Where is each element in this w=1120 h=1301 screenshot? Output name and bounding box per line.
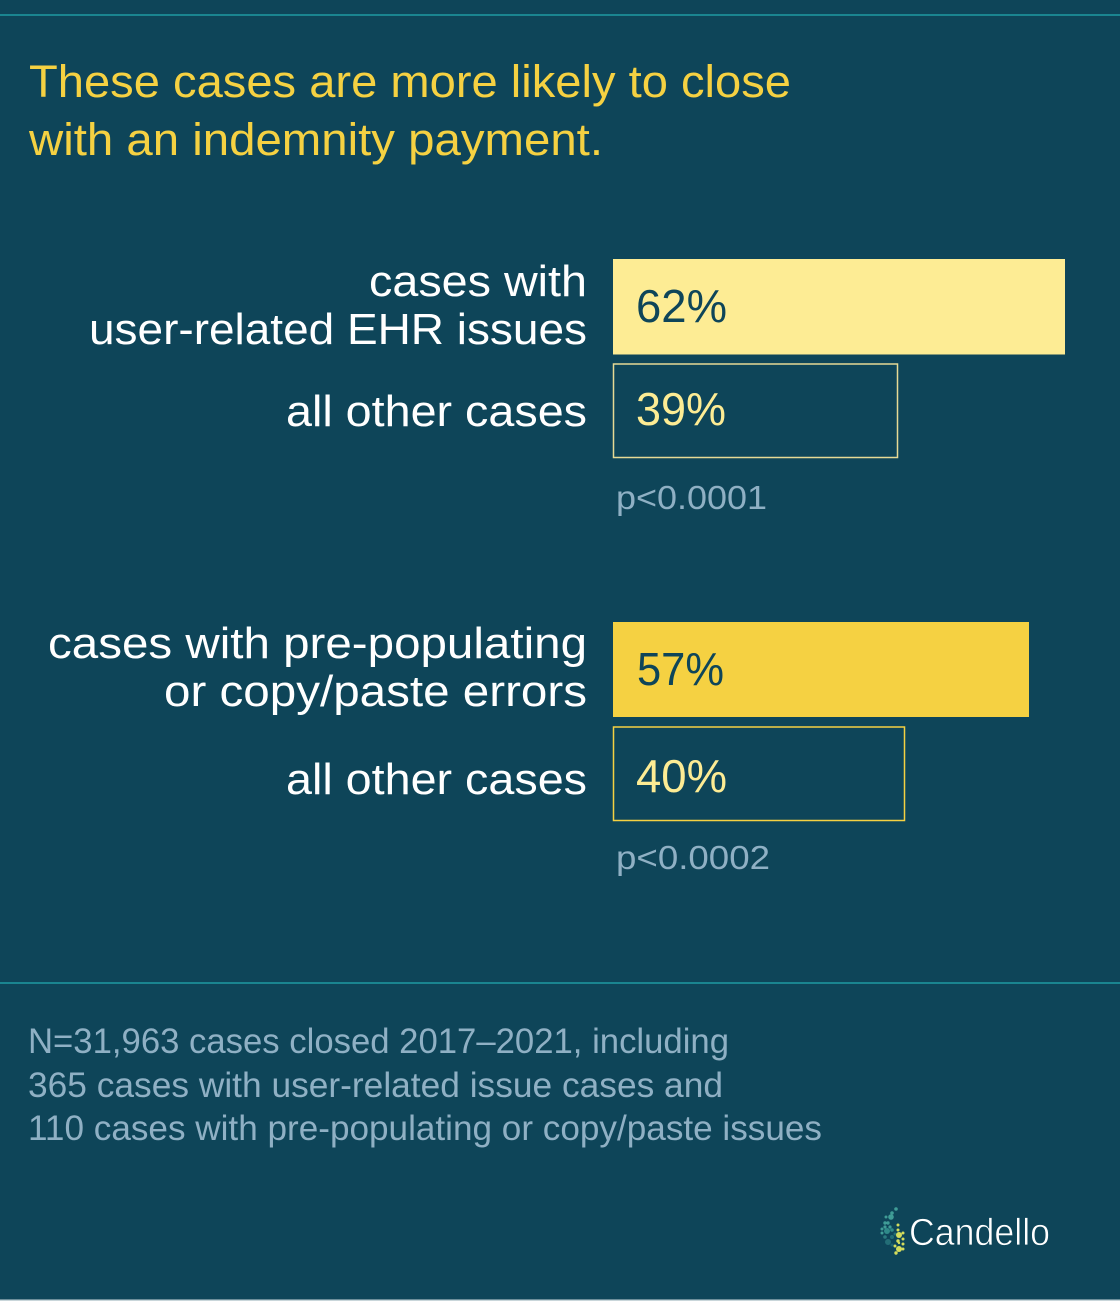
- logo: Candello: [880, 1207, 1050, 1255]
- icon: candle flame dots: [880, 1207, 904, 1255]
- title: with an indemnity payment.: [28, 114, 603, 165]
- p value: p<0.0002: [616, 839, 770, 876]
- footnote: 365 cases with user-related issue cases and: [28, 1066, 723, 1105]
- bar: 40%: 40%: [636, 750, 727, 802]
- label: cases with user-related EHR issues: user-related EHR issues: [89, 305, 587, 354]
- title: [28, 56, 791, 165]
- label: cases with user-related EHR issues: cases with: [369, 257, 587, 306]
- footnote: N=31,963 cases closed 2017–2021, including: [28, 1022, 729, 1061]
- bar: 57%: [613, 622, 1029, 717]
- label: cases with pre-populating or copy/paste errors: cases with pre-populating: [48, 619, 587, 668]
- chart group: user-related EHR issues: [89, 257, 1065, 516]
- bar: 40%: [614, 727, 904, 820]
- bar: 57%: 57%: [637, 643, 724, 695]
- bar: 39%: [614, 364, 898, 458]
- p value: p<0.0001: [616, 479, 767, 516]
- label: cases with user-related EHR issues: [89, 257, 587, 354]
- wordmark: Candello: [909, 1212, 1050, 1254]
- bar: 39%: 39%: [636, 383, 726, 435]
- title: These cases are more likely to close: [29, 56, 791, 107]
- label: cases with pre-populating or copy/paste errors: or copy/paste errors: [164, 667, 587, 716]
- chart group: pre-populating or copy/paste errors: [48, 619, 1029, 876]
- footnote: [28, 1022, 822, 1148]
- label: cases with pre-populating or copy/paste errors: [48, 619, 587, 716]
- bar: 62%: 62%: [636, 280, 727, 332]
- label: all other cases: all other cases: [286, 387, 587, 436]
- bar: 62%: [613, 259, 1065, 354]
- footnote: 110 cases with pre-populating or copy/paste issues: [28, 1109, 822, 1148]
- label: all other cases: all other cases: [286, 755, 587, 804]
